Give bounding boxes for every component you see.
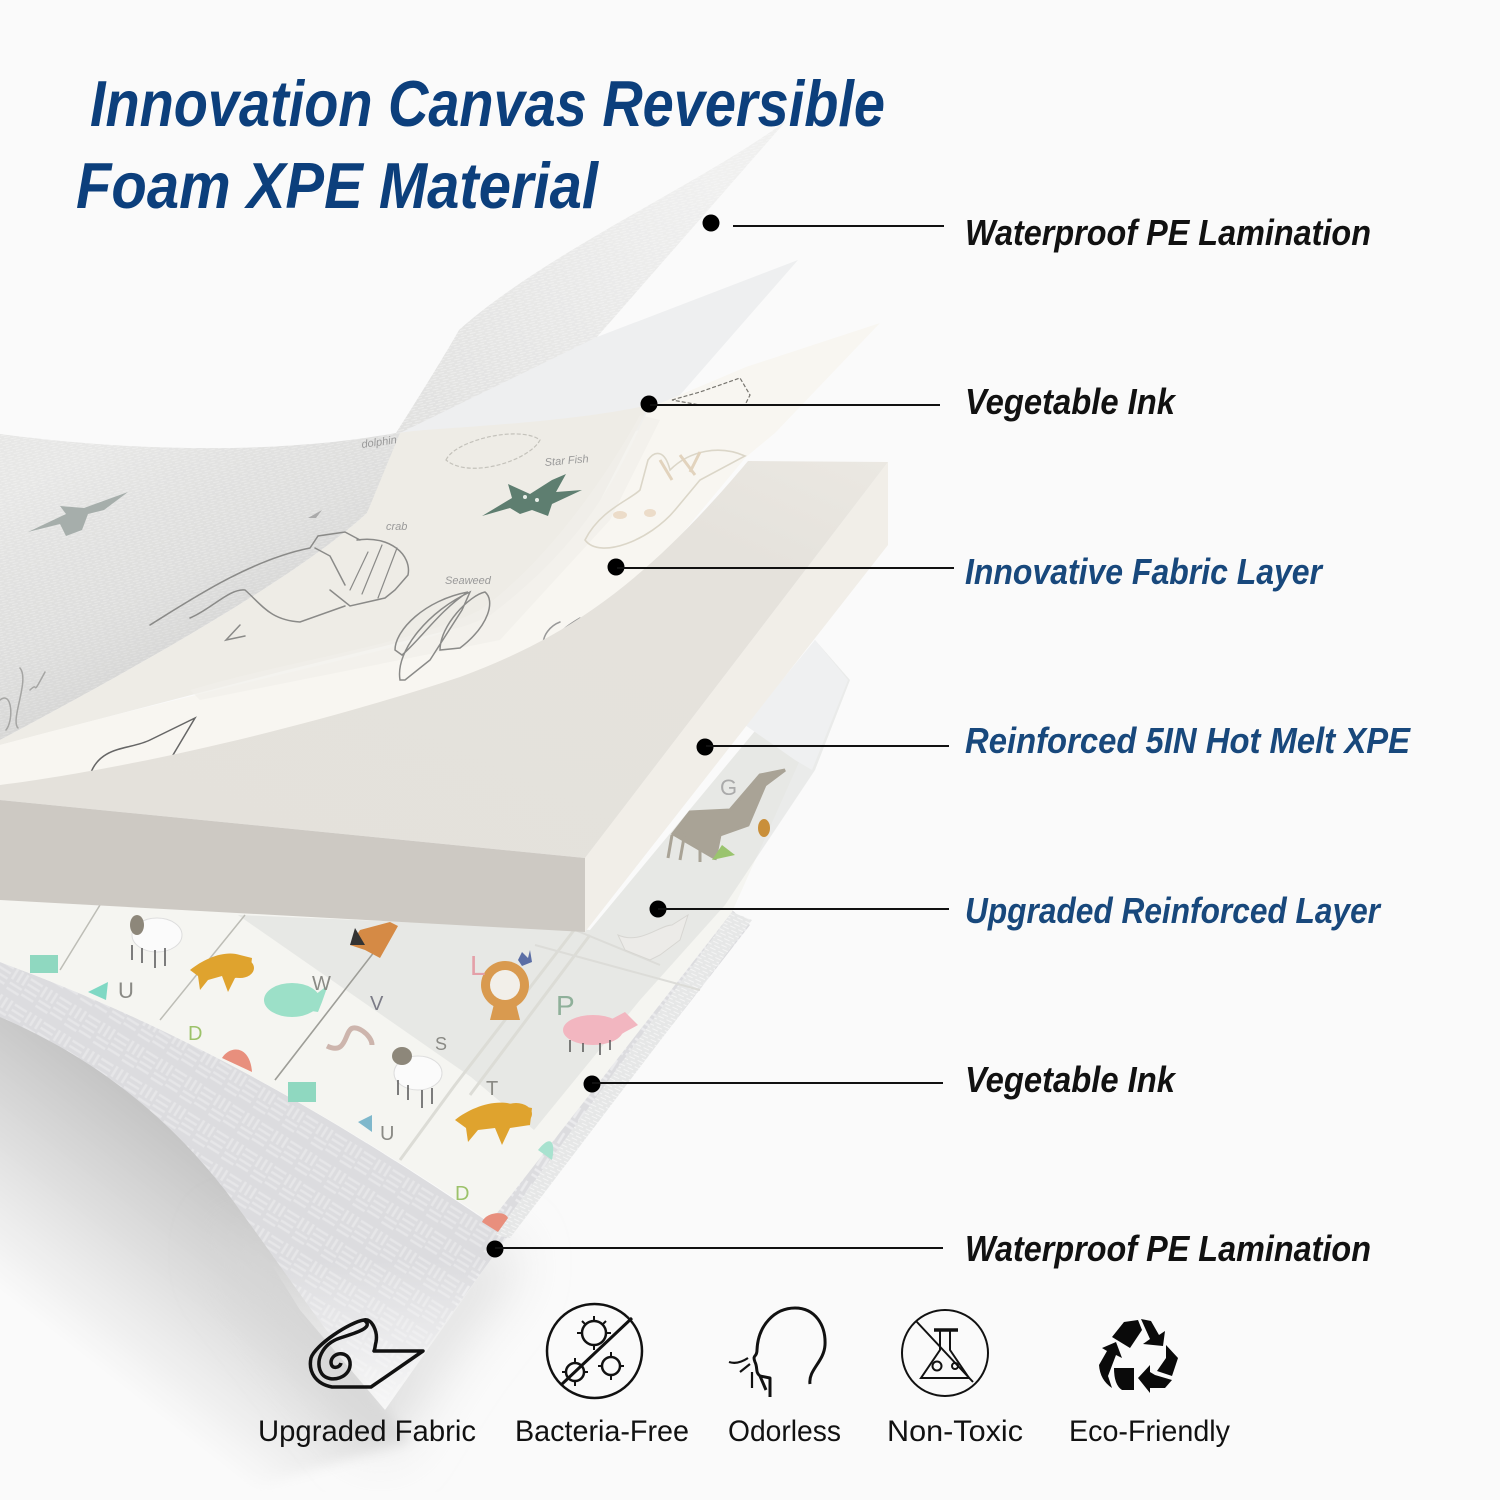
callout: fabric layer: Innovative Fabric Layer [965, 551, 1324, 592]
callout: XPE [696, 720, 1411, 761]
layer: reinforced XPE foam slab [0, 461, 888, 932]
letters on mat: D [455, 1183, 469, 1205]
title: Innovation Canvas Reversible [90, 67, 885, 140]
layer: light grey film [400, 260, 798, 470]
title: Foam XPE Material [76, 149, 600, 222]
animal: snake [327, 1028, 372, 1048]
layer: bottom grey fabric lamination [0, 910, 752, 1410]
title [76, 67, 885, 222]
caption row: Non-Toxic [887, 1415, 1023, 1448]
letters on mat: S [435, 1034, 447, 1054]
callout: vegetable ink top: Vegetable Ink [965, 381, 1177, 422]
illustrations: small captions: Seaweed [445, 575, 492, 587]
fold lines [60, 905, 700, 1160]
letters on mat: P [556, 990, 575, 1021]
illustrations: small captions [361, 434, 589, 587]
animal: hedgehogs and frogs [30, 955, 553, 1232]
animal: rabbit [618, 915, 688, 960]
caption row [258, 1415, 1230, 1448]
bottom shadow [0, 985, 500, 1500]
callout: reinforced layer [650, 890, 1382, 931]
translucent reinforced layer overlay [238, 640, 850, 1130]
icon: recycle [1099, 1319, 1178, 1393]
caption row: Upgraded Fabric [258, 1415, 476, 1448]
callout: vegetable ink bottom [584, 1059, 1177, 1100]
callout: waterproof top: Waterproof PE Lamination [965, 212, 1371, 253]
callout: fabric layer [608, 551, 1324, 592]
caption row: Odorless [728, 1415, 841, 1448]
illustrations: small captions: crab [386, 521, 407, 533]
callout: vegetable ink bottom: Vegetable Ink [965, 1059, 1177, 1100]
caption row: Bacteria-Free [515, 1415, 689, 1448]
letters on mat: U [118, 978, 134, 1003]
animal: tigers [190, 953, 532, 1145]
animal: whale [264, 983, 328, 1017]
icon: bacteria free [547, 1304, 642, 1398]
illustrations: small captions: dolphin [361, 434, 398, 451]
illustrations: octopus [585, 450, 745, 548]
layer: printed ink mat, colourful animals [0, 640, 850, 1232]
layer: top waterproof PE lamination, textured [0, 122, 785, 740]
animal: pig [563, 1012, 638, 1055]
callout: vegetable ink top [640, 381, 1177, 422]
callout: waterproof bottom [486, 1228, 1371, 1269]
animal: giraffe [668, 770, 785, 862]
letters on mat: T [486, 1078, 498, 1100]
icon: odorless head [729, 1308, 825, 1397]
letters on mat: V [370, 993, 384, 1015]
icon: fabric roll [310, 1320, 423, 1387]
animal: owl [350, 922, 398, 958]
animal: sheep [130, 915, 442, 1108]
letters on mat: G [720, 775, 737, 800]
illustrations: small captions: Star Fish [544, 453, 589, 469]
icon: non-toxic flask [902, 1310, 988, 1396]
caption row: Eco-Friendly [1069, 1415, 1230, 1448]
callout: XPE: Reinforced 5IN Hot Melt XPE [965, 720, 1411, 761]
callout: reinforced layer: Upgraded Reinforced Layer [965, 890, 1382, 931]
callout: waterproof top [702, 212, 1371, 253]
animal: lion [481, 950, 532, 1020]
letters on mat: L [470, 950, 486, 981]
letters on mat: U [380, 1123, 394, 1145]
layer: printed ink sheet, upper [0, 323, 880, 800]
illustrations: line art [0, 532, 580, 778]
letters on mat: D [188, 1023, 202, 1045]
illustrations: starfish [28, 474, 582, 536]
letters on mat [118, 775, 737, 1205]
letters on mat: W [312, 973, 331, 995]
callout: waterproof bottom: Waterproof PE Lamination [965, 1228, 1371, 1269]
